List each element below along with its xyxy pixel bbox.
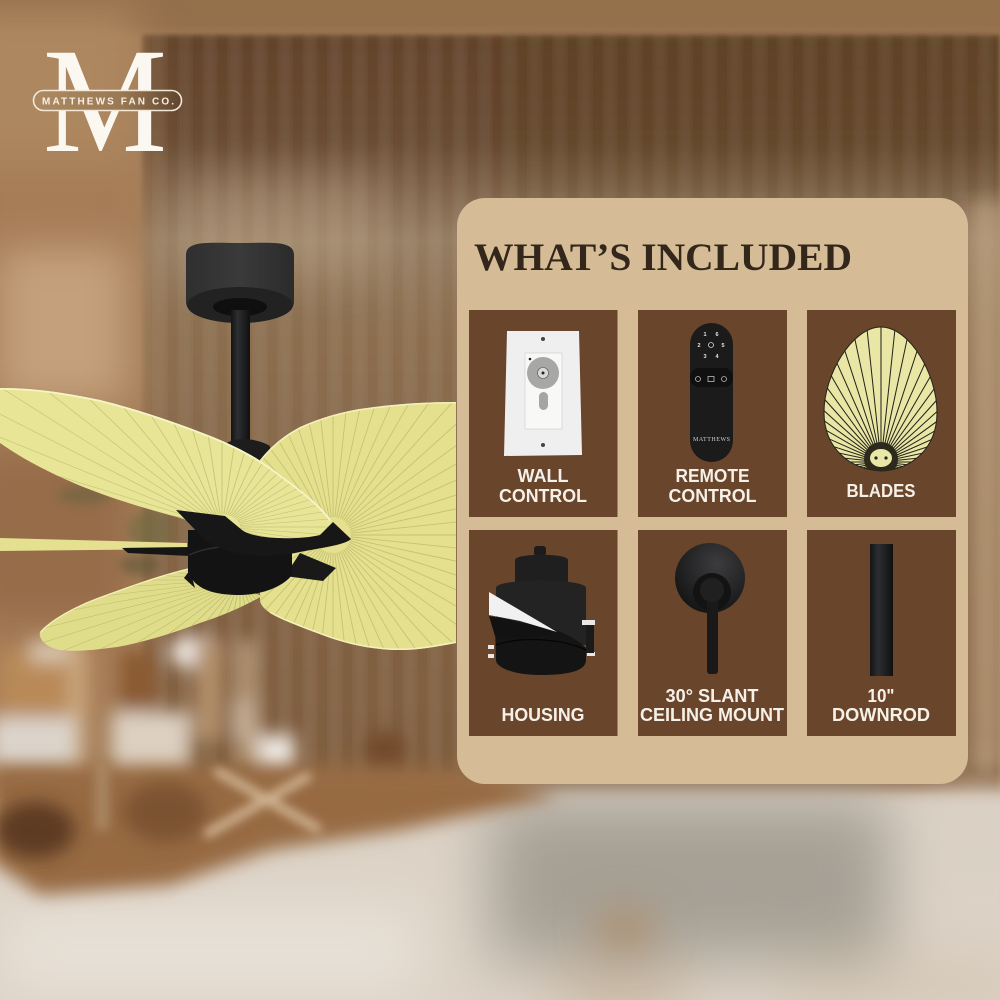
icon: remote: MATTHEWS (693, 437, 730, 443)
card: housing (469, 530, 618, 736)
downrod (231, 310, 250, 445)
icon: downrod (870, 544, 893, 676)
blade arm upper (176, 510, 351, 556)
blurred furniture (0, 623, 410, 776)
card: remote control (638, 310, 787, 517)
icon: ceiling mount (675, 543, 745, 674)
floor and rug (0, 760, 1000, 1000)
fan canopy (186, 243, 294, 323)
ceiling fan (0, 242, 456, 651)
logo: Matthews Fan Co.: M (43, 18, 167, 184)
label: wall control (499, 466, 587, 506)
label: slant ceiling mount (640, 686, 784, 725)
label: housing: HOUSING (502, 705, 584, 725)
card: blades (807, 310, 956, 517)
label: remote control: CONTROL (668, 486, 756, 506)
card: slant ceiling mount (638, 530, 787, 736)
blade arm right lower (285, 553, 336, 581)
label: slant ceiling mount: 30° SLANT (666, 686, 759, 706)
label: wall control: CONTROL (499, 486, 587, 506)
icon: remote: 5 (721, 343, 725, 349)
left wall (0, 10, 140, 720)
label: remote control (668, 466, 756, 506)
upper housing collar (224, 439, 270, 480)
icon: remote: 6 (715, 332, 719, 338)
blade: right (260, 402, 456, 650)
motor housing (184, 530, 292, 595)
icon: remote: 4 (715, 354, 719, 360)
icon: housing (488, 546, 595, 675)
blade: lower left (40, 568, 262, 651)
heading: WHAT’S INCLUDED (474, 236, 852, 279)
card: wall control (469, 310, 618, 517)
label: downrod: DOWNROD (832, 705, 930, 725)
icon: palm blade (824, 326, 938, 472)
label: wall control: WALL (518, 466, 568, 486)
label: blades: BLADES (846, 481, 916, 501)
icon: remote: 3 (703, 354, 707, 360)
panel: what's included (457, 198, 1000, 784)
blade: far left edge-on (0, 538, 187, 551)
blurred plant (59, 486, 172, 575)
icon: remote: 1 (703, 332, 707, 338)
icon: remote: 2 (697, 343, 701, 349)
back wall with vertical slats (142, 34, 1000, 794)
label: slant ceiling mount: CEILING MOUNT (640, 705, 784, 725)
label: downrod (832, 686, 930, 725)
icon: wall control (504, 331, 582, 456)
icon: remote (690, 323, 733, 462)
card: downrod (807, 530, 956, 736)
label: downrod: 10" (868, 686, 894, 706)
logo: Matthews Fan Co.: MATTHEWS FAN CO. (42, 96, 174, 108)
blade: upper left (0, 388, 332, 538)
ceiling band (0, 0, 1000, 32)
rear blade arm (122, 547, 190, 556)
label: remote control: REMOTE (676, 466, 750, 486)
